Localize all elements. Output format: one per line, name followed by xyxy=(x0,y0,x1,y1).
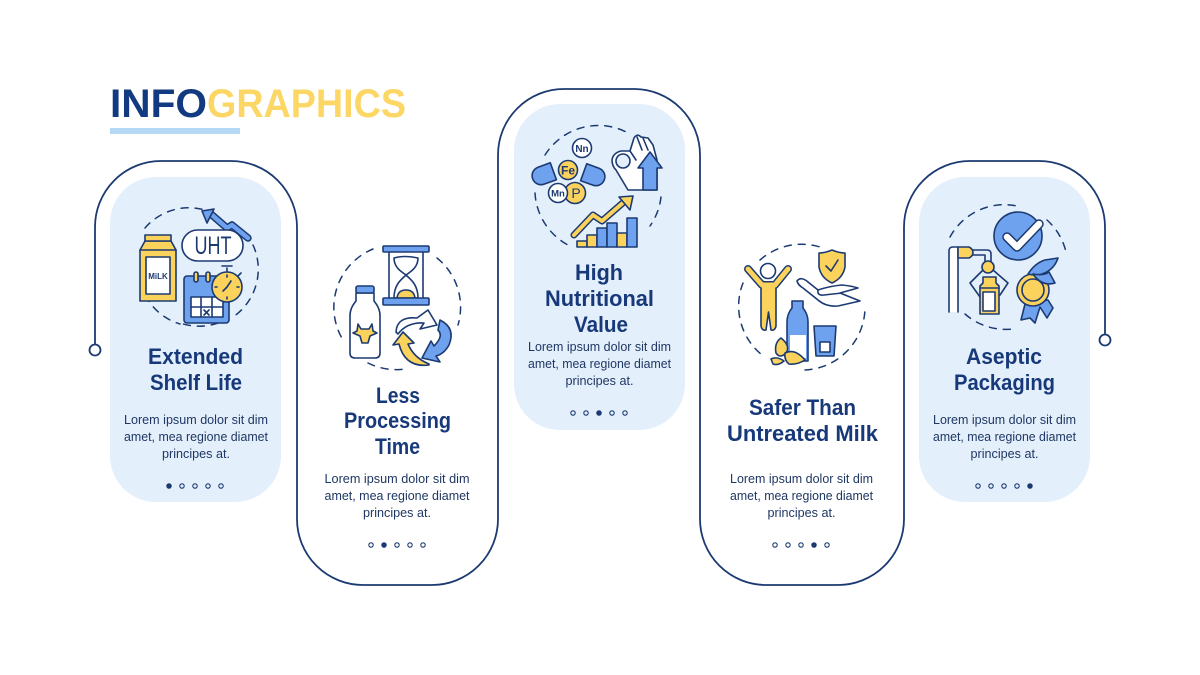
heading: High xyxy=(575,260,623,285)
pagination dots xyxy=(167,484,223,488)
panel: extended shelf life xyxy=(124,208,269,488)
pagination dots xyxy=(773,543,829,547)
description: Lorem ipsum dolor sit dim xyxy=(528,340,671,354)
panel: high nutritional value xyxy=(528,125,672,415)
heading xyxy=(954,344,1055,395)
description xyxy=(124,413,269,461)
description: amet, mea regione diamet xyxy=(933,430,1077,444)
icon: minerals, capsules, hand, arrow and growth chart xyxy=(530,125,662,247)
description: principes at. xyxy=(970,447,1038,461)
heading: Untreated Milk xyxy=(727,421,879,446)
description: principes at. xyxy=(162,447,230,461)
heading: Shelf Life xyxy=(150,370,242,395)
pagination dots xyxy=(369,543,425,547)
description: principes at. xyxy=(566,374,634,388)
panel: safer than untreated milk xyxy=(727,244,879,547)
title: INFO xyxy=(110,82,207,126)
description: amet, mea regione diamet xyxy=(730,489,874,503)
description: Lorem ipsum dolor sit dim xyxy=(324,472,470,486)
heading: Extended xyxy=(148,344,243,369)
description: amet, mea regione diamet xyxy=(324,489,470,503)
icon: person, protective hand, bottle, glass and leaves xyxy=(739,244,865,370)
description xyxy=(730,472,874,520)
heading: Nutritional xyxy=(545,286,654,311)
icon: minerals, capsules, hand, arrow and growth chart: Nn xyxy=(575,144,589,155)
heading: Time xyxy=(375,434,420,459)
icon: milk carton, UHT, calendar and stopwatch xyxy=(140,208,258,326)
description xyxy=(324,472,470,520)
description xyxy=(528,340,672,388)
pagination dots xyxy=(976,484,1032,488)
description: Lorem ipsum dolor sit dim xyxy=(730,472,873,486)
icon: packaging arm, check badge and award ribbon xyxy=(949,205,1066,329)
panel backgrounds: tinted cards xyxy=(110,104,1090,502)
icon: milk carton, UHT, calendar and stopwatch: MiLK xyxy=(148,272,168,281)
heading: Packaging xyxy=(954,370,1055,395)
heading xyxy=(545,260,654,337)
description: Lorem ipsum dolor sit dim xyxy=(933,413,1076,427)
icon: milk carton, UHT, calendar and stopwatch: UHT xyxy=(194,232,232,260)
heading: Value xyxy=(574,312,628,337)
title: GRAPHICS xyxy=(207,82,406,126)
heading: Aseptic xyxy=(966,344,1042,369)
connecting outline xyxy=(90,89,1110,585)
icon: hourglass, milk bottle and cycle arrows xyxy=(334,246,461,370)
description: amet, mea regione diamet xyxy=(528,357,672,371)
description: principes at. xyxy=(363,506,431,520)
panel: less processing time xyxy=(324,246,470,547)
heading xyxy=(344,383,451,459)
icon: minerals, capsules, hand, arrow and growth chart: P xyxy=(571,185,581,201)
pagination dots xyxy=(571,411,627,415)
heading xyxy=(727,395,879,446)
heading: Less xyxy=(376,383,420,408)
icon: minerals, capsules, hand, arrow and growth chart: Mn xyxy=(551,188,565,200)
heading xyxy=(148,344,243,395)
description: principes at. xyxy=(768,506,836,520)
icon: minerals, capsules, hand, arrow and growth chart: Fe xyxy=(561,164,575,178)
description: Lorem ipsum dolor sit dim xyxy=(124,413,268,427)
description: amet, mea regione diamet xyxy=(124,430,269,444)
heading: Safer Than xyxy=(749,395,856,420)
description xyxy=(933,413,1077,461)
title xyxy=(110,82,406,134)
panel: aseptic packaging xyxy=(933,205,1077,488)
heading: Processing xyxy=(344,408,451,433)
